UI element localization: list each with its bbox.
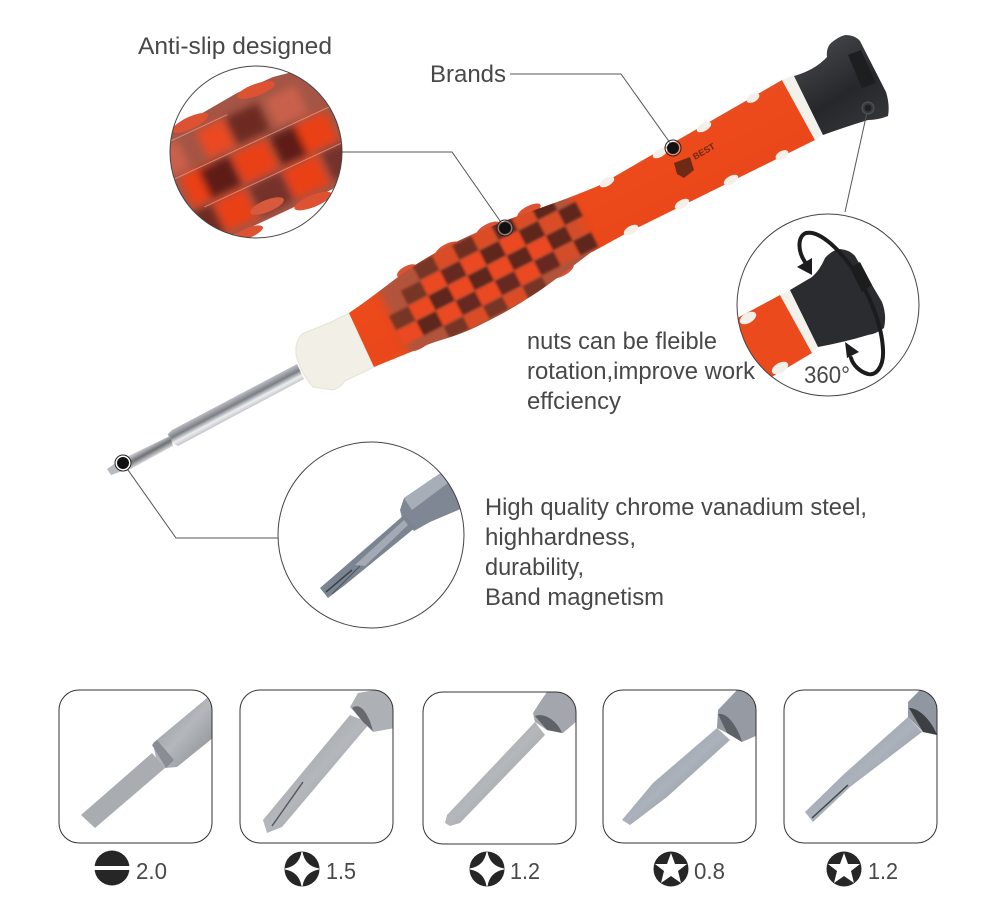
marker: brand — [665, 140, 681, 156]
text: steel description: Band magnetism — [485, 584, 664, 611]
size label: flat 2.0 — [94, 850, 167, 886]
size label: flat 2.0: 2.0 — [136, 858, 167, 884]
callout line: nut — [845, 108, 868, 212]
card: flat 2.0 — [59, 690, 214, 843]
arrows: 360 rotation — [797, 233, 883, 374]
size label: phillips 1.2 — [470, 852, 540, 886]
size label: phillips 1.2: 1.2 — [510, 858, 540, 884]
marker: grip — [497, 220, 513, 236]
size label: torx 1.2: 1.2 — [868, 858, 898, 884]
marker: tip — [115, 455, 131, 471]
handle spots — [598, 91, 790, 237]
white collar — [296, 313, 374, 390]
orange handle — [349, 80, 815, 367]
label: 360 degrees: 360° — [804, 362, 850, 389]
grip lobes — [395, 200, 576, 354]
size label: phillips 1.5 — [284, 852, 356, 886]
callout line: tip — [123, 463, 278, 538]
text: steel description: durability, — [485, 554, 584, 581]
card: phillips 1.5 — [240, 690, 395, 843]
text: nuts description: rotation,improve work — [527, 358, 756, 385]
card: phillips 1.2 — [423, 692, 578, 844]
size label: torx 0.8: 0.8 — [694, 858, 725, 884]
label: brands: Brands — [430, 61, 506, 88]
logo — [674, 141, 717, 178]
checker grip — [376, 196, 600, 354]
logo: BEST — [691, 141, 717, 162]
text: steel description — [485, 494, 867, 611]
magnifier: rotating nut — [730, 214, 919, 400]
screwdriver — [107, 35, 889, 475]
text: nuts description: nuts can be fleible — [527, 328, 717, 355]
marker: nut — [862, 102, 874, 114]
black end cap — [794, 35, 889, 135]
text: steel description: High quality chrome vanadium steel, — [485, 494, 867, 521]
size label: phillips 1.5: 1.5 — [326, 858, 356, 884]
magnifier: anti-slip grip — [170, 66, 342, 238]
card: torx 1.2 — [784, 690, 939, 843]
callout line: brands — [510, 74, 673, 147]
card: torx 0.8 — [603, 690, 758, 843]
white corners outside the grip — [174, 69, 288, 126]
callout line: anti-slip — [342, 152, 505, 228]
white band — [782, 75, 825, 140]
text: steel description: highhardness, — [485, 524, 636, 551]
metal shaft — [107, 364, 304, 475]
size label: torx 0.8 — [654, 852, 725, 886]
text: nuts description: effciency — [527, 388, 621, 415]
text: nuts description — [527, 328, 756, 415]
size label: torx 1.2 — [826, 852, 898, 886]
magnifier: tip — [278, 442, 470, 628]
label: anti-slip: Anti-slip designed — [138, 33, 332, 60]
